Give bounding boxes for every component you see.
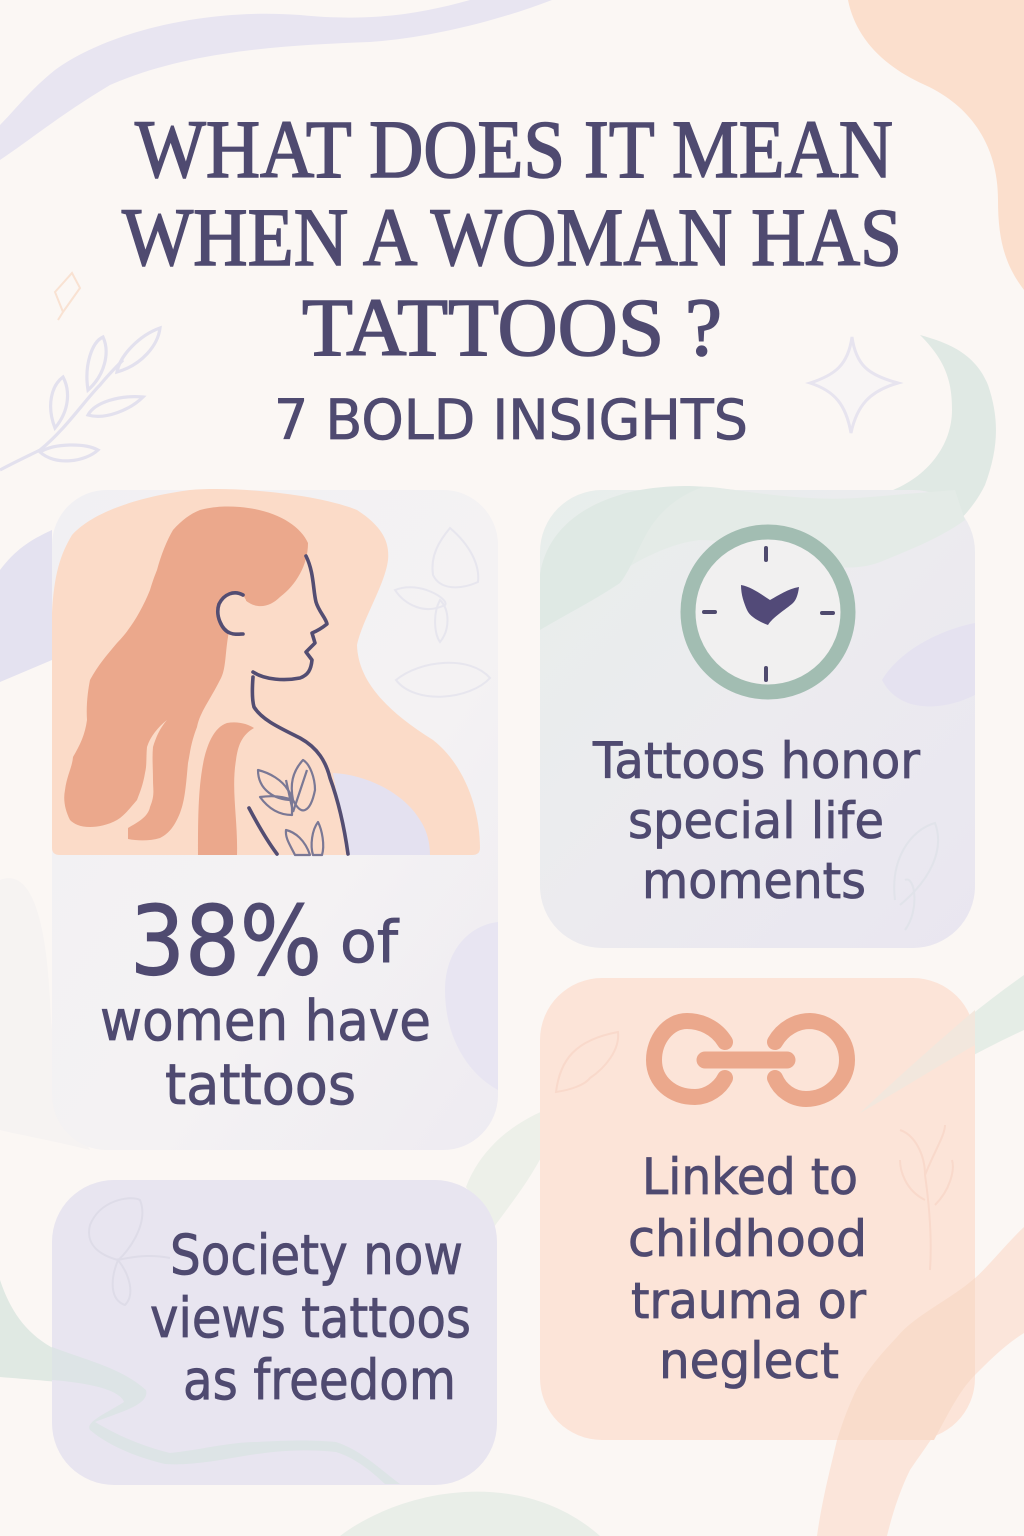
- decorative leaf sprig: [0, 328, 160, 470]
- title: WHAT DOES IT MEAN: [135, 103, 893, 195]
- stat text: [100, 887, 431, 1118]
- title: WHEN A WOMAN HAS: [122, 191, 902, 283]
- panel text: Society now: [170, 1223, 463, 1287]
- decorative small diamond: [55, 273, 80, 320]
- panel: freedom: [52, 1180, 497, 1485]
- woman figure: outline: [218, 556, 348, 854]
- stat text: women have: [100, 989, 431, 1054]
- panel text: childhood: [628, 1210, 867, 1268]
- panel text: trauma or: [631, 1272, 866, 1330]
- title: [122, 103, 902, 373]
- panel text: views tattoos: [150, 1286, 471, 1350]
- panel text: as freedom: [183, 1348, 456, 1412]
- panel: life moments: [540, 486, 975, 948]
- decorative sparkle: [810, 337, 898, 433]
- icon: clock with heart: [688, 532, 848, 692]
- faint leaf: [894, 823, 938, 930]
- woman figure: hair: [64, 506, 308, 840]
- woman figure: hair over shoulder: [198, 722, 254, 855]
- faint butterfly: [89, 1198, 170, 1305]
- panel text: Linked to: [642, 1148, 858, 1206]
- faint leaves: [556, 1032, 953, 1270]
- icon: chain link: [654, 1021, 847, 1099]
- lavender shape behind shoulder: [333, 773, 430, 855]
- background peach swoosh bottom right: [817, 1227, 1024, 1536]
- panel text: Tattoos honor: [592, 732, 920, 790]
- peach figure background: [52, 489, 480, 855]
- woman figure: ear fill: [218, 593, 246, 634]
- panel text: special life: [628, 792, 884, 850]
- panel text: [150, 1223, 471, 1412]
- panel: 38% of women have tattoos: [52, 489, 498, 1150]
- subtitle: 7 BOLD INSIGHTS: [274, 388, 748, 452]
- title: TATTOOS ?: [302, 281, 722, 373]
- panel: childhood trauma: [540, 978, 975, 1440]
- stat text: 38%: [130, 887, 322, 997]
- woman figure: arm tattoo leaves: [258, 760, 323, 855]
- stat text: tattoos: [165, 1053, 356, 1118]
- panel text: [628, 1148, 867, 1390]
- panel text: [592, 732, 920, 910]
- panel text: neglect: [659, 1332, 839, 1390]
- faint leaf decorations: [395, 528, 490, 697]
- stat text: of: [340, 908, 400, 976]
- panel text: moments: [642, 852, 866, 910]
